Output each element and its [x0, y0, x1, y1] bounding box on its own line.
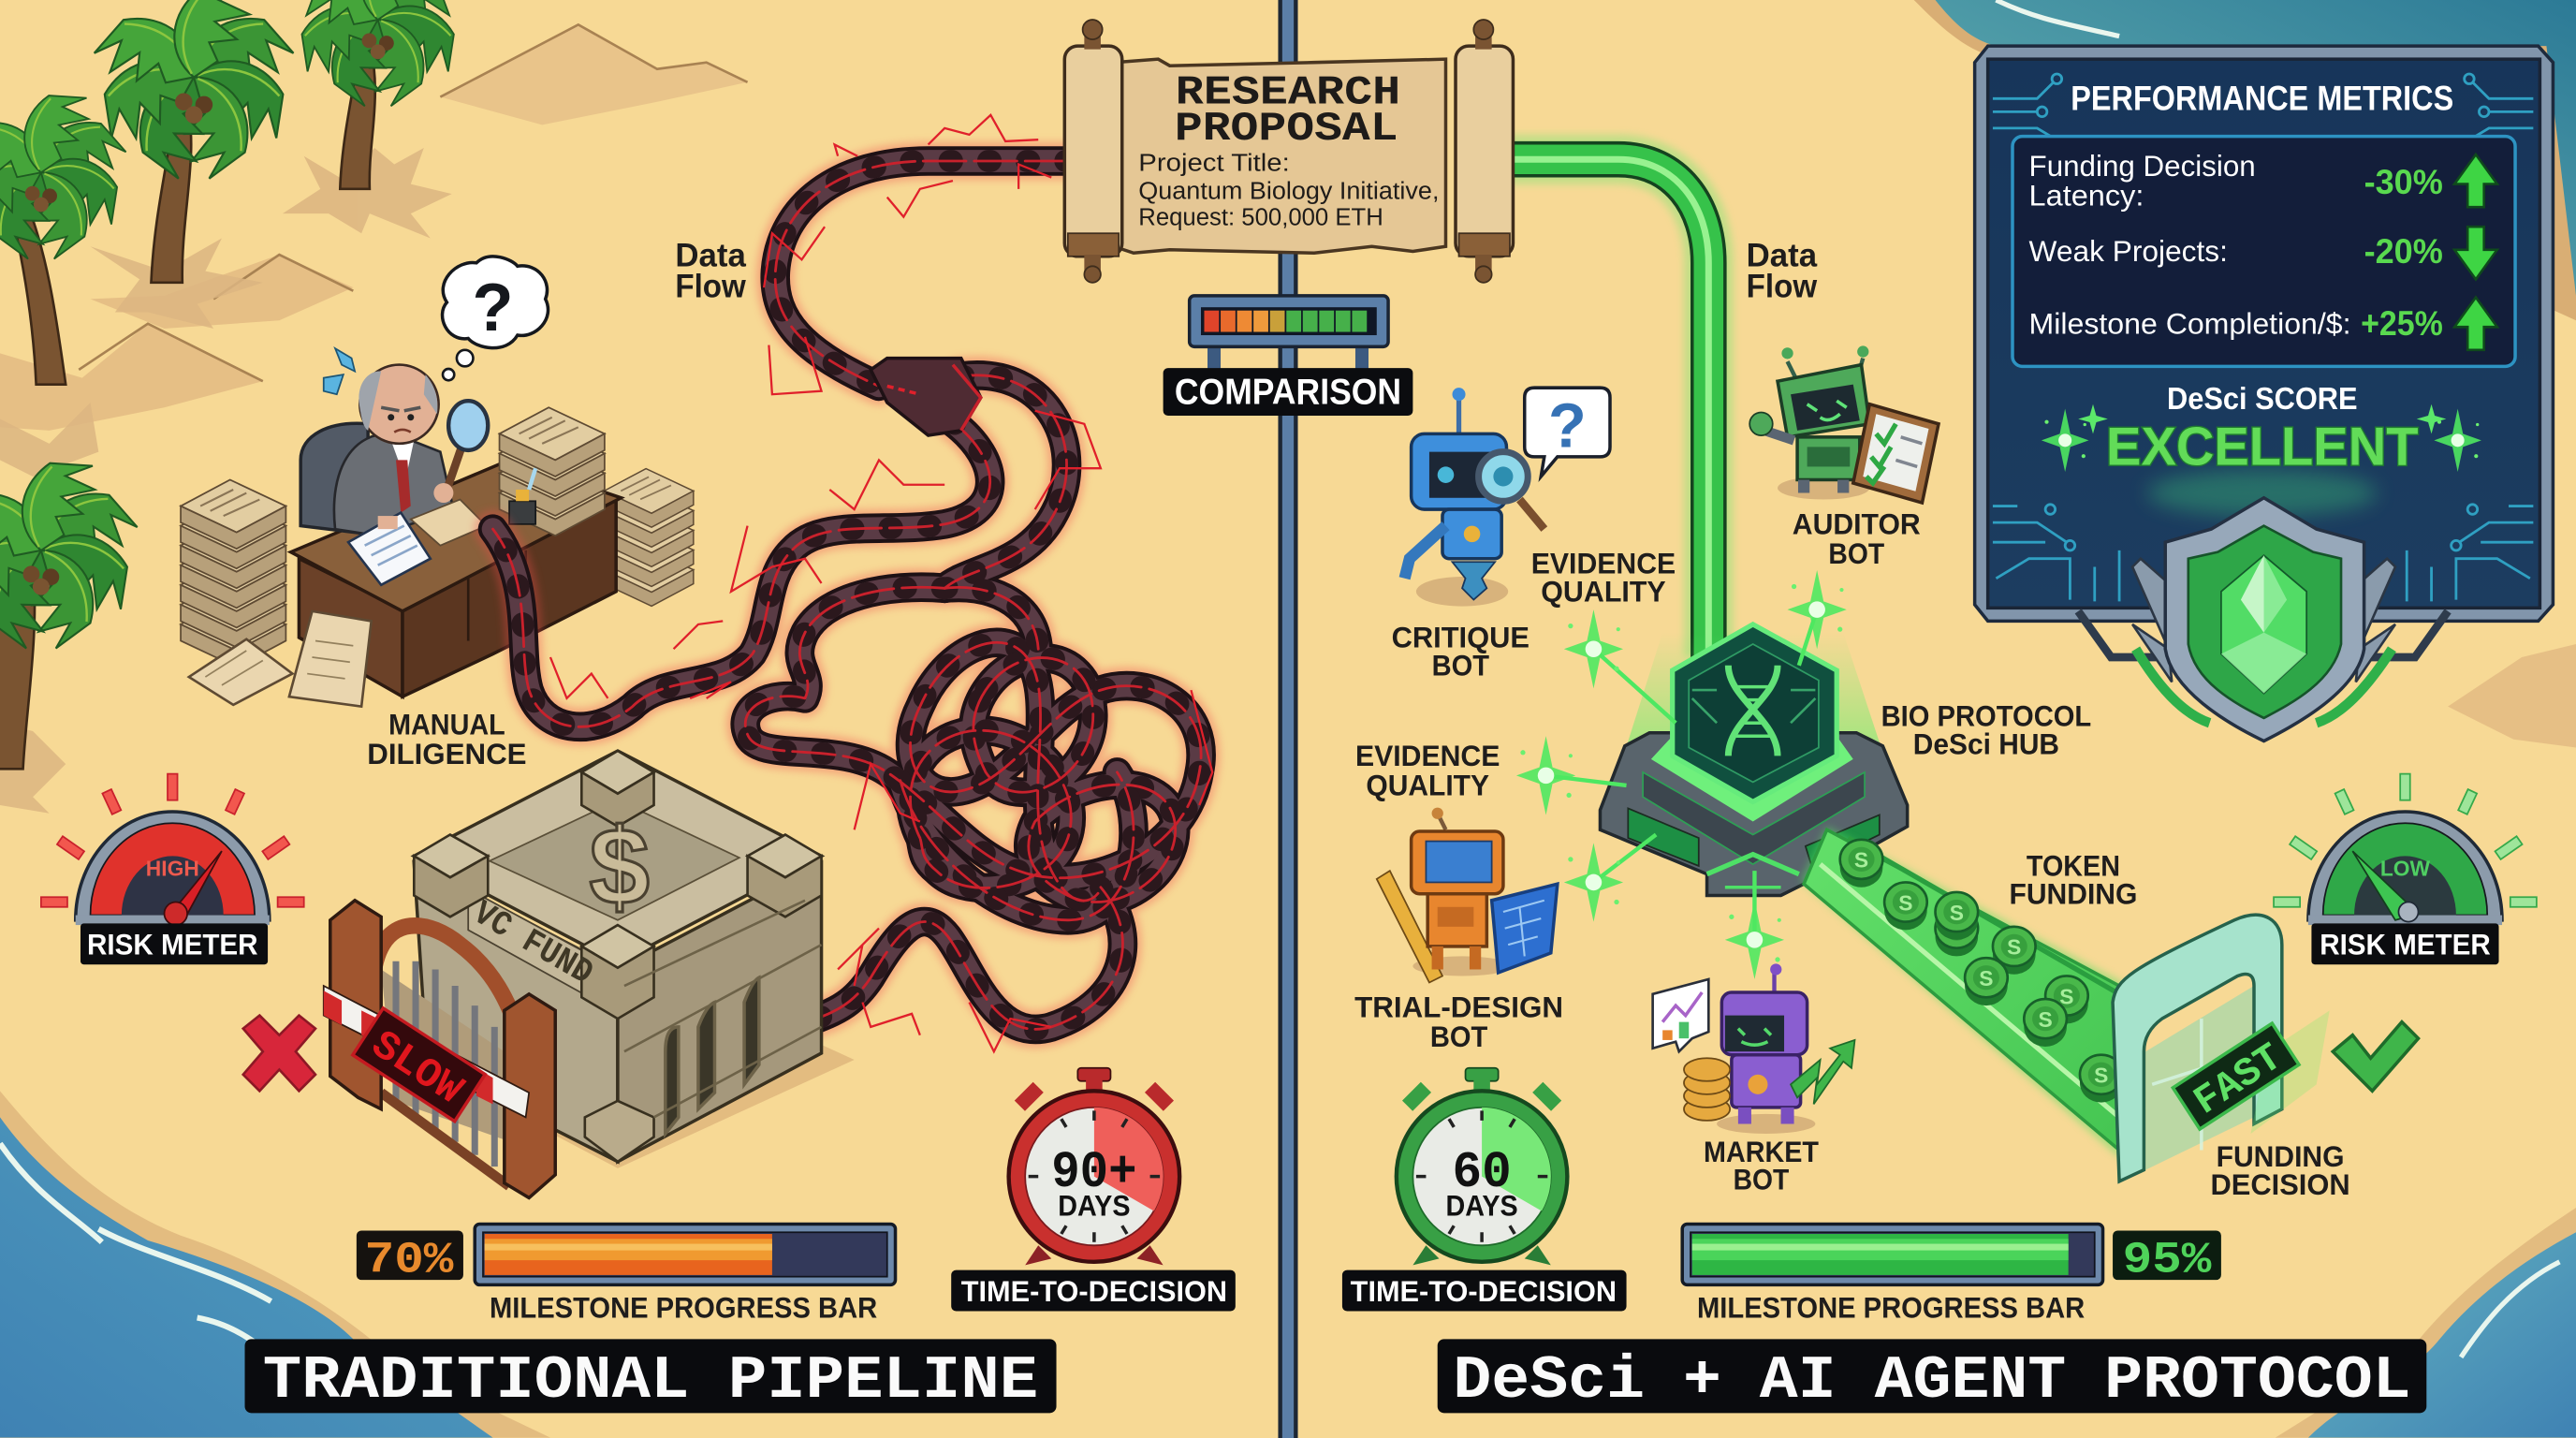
- scroll details: [1138, 149, 1439, 230]
- sea: bottom right: [2276, 1208, 2576, 1438]
- stopwatch 90+ days: [1009, 1068, 1179, 1265]
- data flow label right: [1747, 237, 1818, 305]
- center divider: [1278, 0, 1298, 1438]
- metrics box: Latency:: [2029, 178, 2144, 212]
- risk meter high: RISK METER: [87, 928, 258, 961]
- ink pot: [509, 468, 535, 524]
- evidence quality label lower: QUALITY: [1366, 768, 1489, 801]
- bio protocol label: DeSci HUB: [1913, 727, 2059, 761]
- sea: top right: [1914, 0, 2576, 320]
- market bot: [1653, 963, 1855, 1134]
- progress 70 percent: 70%: [365, 1236, 454, 1285]
- speech bubble: ?: [1548, 391, 1587, 461]
- scroll title: [1175, 70, 1400, 153]
- slow tape: [324, 986, 529, 1117]
- evidence quality label upper: QUALITY: [1541, 574, 1666, 608]
- frieze band: [468, 888, 587, 996]
- metrics box: -30%: [2364, 163, 2443, 201]
- progress 95 percent: [1682, 1224, 2221, 1285]
- trial design label: BOT: [1430, 1020, 1487, 1053]
- vc fund frieze: VC FUND: [466, 894, 599, 994]
- slow sign: SLOW: [362, 1022, 471, 1115]
- token funding label: FUNDING: [2009, 876, 2137, 910]
- milestone label left: MILESTONE PROGRESS BAR: [490, 1291, 877, 1325]
- research proposal scroll: [1064, 20, 1513, 283]
- metrics box: Weak Projects:: [2029, 234, 2228, 268]
- bio protocol label: BIO PROTOCOL: [1881, 699, 2091, 733]
- palm tree 4: [0, 451, 141, 769]
- market bot label: [1704, 1135, 1819, 1196]
- auditor bot label: AUDITOR: [1793, 506, 1921, 540]
- red x mark: [243, 1016, 315, 1091]
- connecting sparkles: [1516, 570, 1847, 979]
- vault corner blocks: [414, 751, 822, 1162]
- blueprint: [1492, 884, 1558, 973]
- funding decision label: DECISION: [2210, 1167, 2350, 1201]
- magnifying glass: [433, 401, 488, 503]
- tokens: [1840, 840, 2123, 1103]
- slow sign: [353, 1008, 485, 1122]
- rusty gate: [324, 901, 555, 1197]
- palm tree 2: [289, 0, 466, 189]
- emerald shield: [2078, 498, 2448, 741]
- metrics box: [2012, 137, 2515, 366]
- data flow label left: Data: [675, 237, 746, 273]
- desk papers: [348, 500, 487, 585]
- risk meter low: RISK METER: [2320, 928, 2491, 961]
- vc fund vault: [414, 751, 855, 1168]
- auditor bot: [1749, 345, 1939, 503]
- data flow label right: Data: [1747, 237, 1818, 273]
- lightning sparks: [550, 115, 1212, 1051]
- risk meter low: [2274, 774, 2537, 964]
- fast sign: [2173, 1023, 2300, 1131]
- clipboard: [1853, 404, 1939, 503]
- green check: [2333, 1022, 2419, 1091]
- token funding label: [2009, 848, 2137, 910]
- comparison gauge: [1190, 296, 1388, 372]
- red tangled pipeline: [493, 115, 1212, 1051]
- pipe coupler: [871, 359, 981, 435]
- data flow label left: Flow: [675, 269, 746, 305]
- data flow label left: [675, 237, 746, 305]
- coin stack: [1684, 1058, 1730, 1121]
- green data pipe: [1508, 159, 1708, 657]
- manual diligence label: MANUAL: [388, 707, 505, 741]
- thought bubble: [443, 257, 549, 380]
- risk meter high: [41, 774, 304, 964]
- market bot label: BOT: [1734, 1163, 1789, 1196]
- evidence quality label lower: [1355, 739, 1500, 801]
- funding decision label: [2210, 1139, 2350, 1201]
- token funding label: TOKEN: [2027, 848, 2120, 882]
- metrics box: +25%: [2361, 304, 2443, 343]
- manual diligence label: [367, 707, 527, 770]
- funding decision label: FUNDING: [2217, 1139, 2345, 1173]
- glass funding door: [2113, 915, 2330, 1181]
- stopwatch 90+ days: DAYS: [1058, 1189, 1131, 1223]
- panel heading: PERFORMANCE METRICS: [2071, 80, 2453, 118]
- token conveyor: [1801, 827, 2123, 1160]
- stopwatch 90+ days: 90+: [1051, 1145, 1137, 1202]
- critique bot label: BOT: [1432, 648, 1489, 682]
- metrics box: Funding Decision: [2029, 149, 2256, 183]
- sea: bottom left: [0, 1091, 550, 1438]
- scroll rollers: [1064, 20, 1513, 283]
- stopwatch 60 days: 60: [1453, 1145, 1512, 1202]
- progress 70 percent: [357, 1224, 896, 1285]
- dunes: [0, 24, 2576, 748]
- title traditional pipeline: TRADITIONAL PIPELINE: [263, 1347, 1038, 1416]
- circuit traces: [1993, 74, 2533, 601]
- time to decision right: TIME-TO-DECISION: [1351, 1274, 1617, 1308]
- speech bubble: [1525, 388, 1610, 477]
- chart bubble: [1653, 979, 1708, 1051]
- progress 95 percent: 95%: [2123, 1236, 2212, 1285]
- paper stacks: [181, 469, 694, 668]
- scroll details: Request: 500,000 ETH: [1138, 202, 1383, 230]
- excellent rating: EXCELLENT: [2106, 418, 2419, 477]
- sweat drops: [324, 348, 355, 394]
- manual diligence scene: [181, 257, 694, 707]
- growth arrow: [1791, 1040, 1855, 1104]
- vault windows: [666, 977, 759, 1134]
- manual diligence label: DILIGENCE: [367, 737, 527, 770]
- evidence quality label upper: EVIDENCE: [1531, 547, 1676, 580]
- title desci protocol: DeSci + AI AGENT PROTOCOL: [1453, 1347, 2411, 1416]
- trial design label: TRIAL-DESIGN: [1354, 990, 1563, 1023]
- evidence quality label upper: [1531, 547, 1676, 608]
- auditor bot label: [1793, 506, 1921, 570]
- milestone label right: MILESTONE PROGRESS BAR: [1697, 1291, 2085, 1325]
- critique bot: [1405, 388, 1610, 607]
- meter ticks: [41, 774, 304, 907]
- bio protocol hub: [1516, 570, 1908, 979]
- data flow label right: Flow: [1747, 269, 1818, 305]
- comparison label: COMPARISON: [1175, 373, 1401, 413]
- man: [334, 365, 453, 536]
- trial design label: [1354, 990, 1563, 1053]
- performance metrics panel: [1975, 46, 2553, 621]
- market bot label: MARKET: [1704, 1135, 1819, 1168]
- evidence quality label lower: EVIDENCE: [1355, 739, 1500, 772]
- auditor bot label: BOT: [1828, 536, 1884, 570]
- critique bot label: [1392, 620, 1530, 682]
- fast sign: FAST: [2187, 1035, 2291, 1124]
- risk meter low: LOW: [2380, 856, 2431, 880]
- metrics box: -20%: [2364, 232, 2443, 271]
- metrics box: Milestone Completion/$:: [2029, 306, 2351, 340]
- palm shadows: [0, 148, 452, 814]
- trial design bot: [1377, 808, 1558, 983]
- scroll details: Quantum Biology Initiative,: [1138, 176, 1439, 204]
- metric arrows: [2454, 154, 2497, 350]
- desk: [291, 460, 621, 697]
- thought bubble: ?: [473, 271, 514, 345]
- scroll details: Project Title:: [1138, 149, 1290, 177]
- stopwatch 60 days: [1397, 1068, 1567, 1265]
- bio protocol label: [1881, 699, 2091, 761]
- middle stack on desk: [500, 407, 605, 536]
- vc fund vault: $: [589, 805, 650, 927]
- risk meter high: HIGH: [146, 856, 199, 880]
- time to decision left: TIME-TO-DECISION: [961, 1274, 1227, 1308]
- dna hexagon: [1673, 624, 1837, 801]
- chair: [300, 423, 368, 534]
- scroll title: RESEARCH: [1176, 70, 1400, 117]
- stopwatch 60 days: DAYS: [1445, 1189, 1518, 1223]
- desci score: DeSci SCORE: [2167, 382, 2358, 417]
- palm tree 1: [90, 0, 298, 283]
- excellent rating: [2042, 404, 2481, 516]
- palm tree 3: [0, 85, 130, 385]
- scrolls on ground: [189, 611, 372, 707]
- meter ticks: [2274, 774, 2537, 907]
- scroll title: PROPOSAL: [1175, 106, 1398, 153]
- critique bot label: CRITIQUE: [1392, 620, 1530, 653]
